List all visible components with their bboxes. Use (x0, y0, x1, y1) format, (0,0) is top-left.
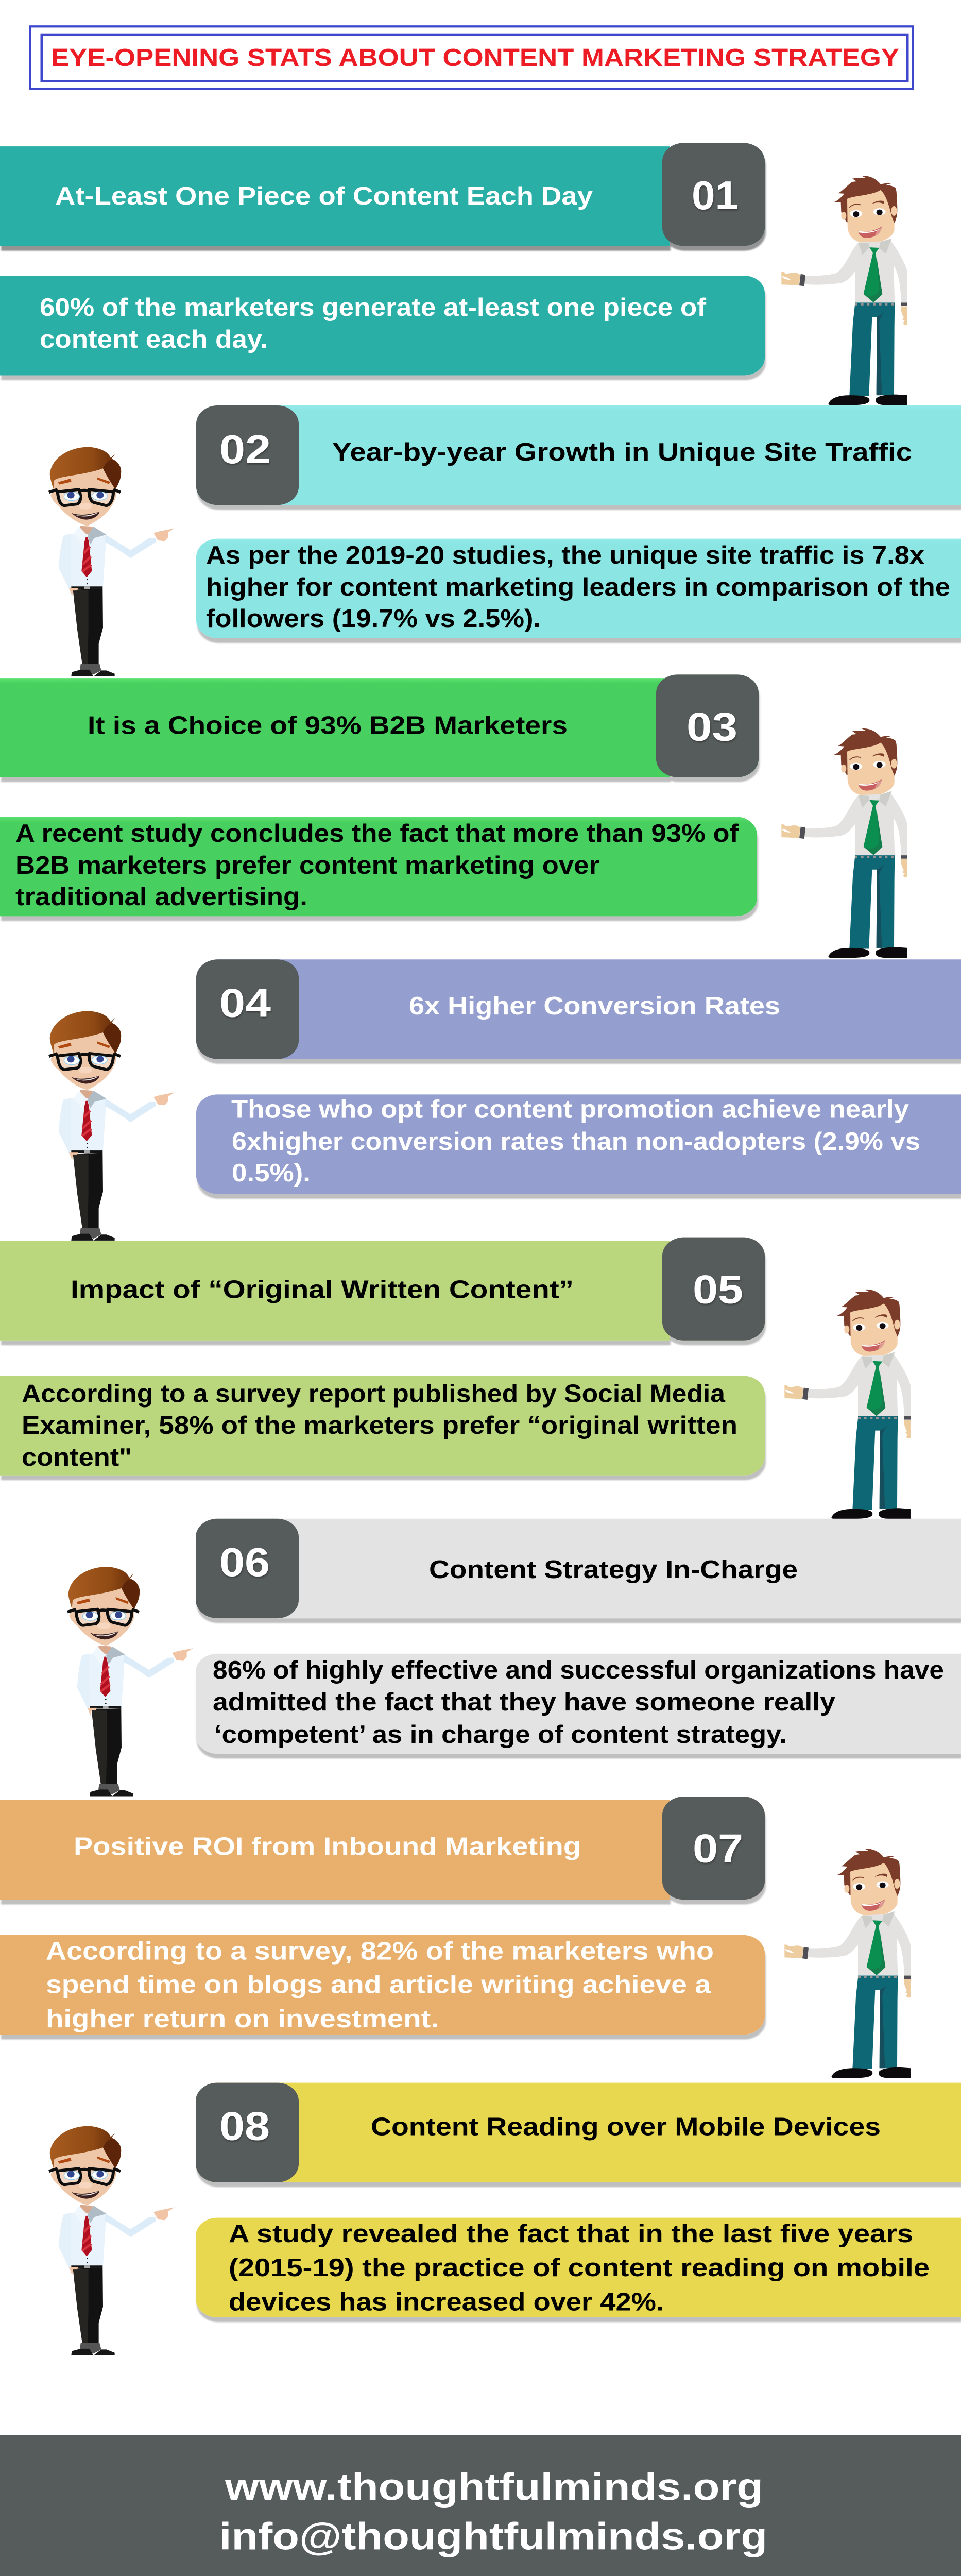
stat 03 header bar: 03 (687, 705, 737, 750)
stat 08 header bar (196, 2083, 961, 2182)
stat 08 header bar: Content Reading over Mobile Devices (371, 2112, 881, 2141)
character: man with glasses 2 (49, 447, 175, 676)
stat 05 text panel: Examiner, 58% of the marketers prefer “original written (22, 1411, 737, 1439)
stat 02 text panel: followers (19.7% vs 2.5%). (206, 604, 541, 633)
character: man with glasses 6 (67, 1567, 193, 1797)
stat 03 text panel: B2B marketers prefer content marketing over (15, 851, 599, 879)
stat 05 text panel: According to a survey report published by Social Media (22, 1379, 726, 1408)
title banner (30, 26, 913, 89)
stat 08 text panel: A study revealed the fact that in the last five years (229, 2219, 913, 2248)
stat 05 header bar (0, 1238, 765, 1341)
stat 07 header bar (0, 1797, 765, 1900)
stat 06 text panel (196, 1654, 961, 1754)
stat 03 text panel (0, 817, 757, 916)
stat 07 text panel: spend time on blogs and article writing achieve a (46, 1971, 711, 1999)
stat 05 text panel (0, 1376, 765, 1476)
stat 01 header bar (0, 143, 765, 246)
stat 04 text panel: Those who opt for content promotion achieve nearly (231, 1095, 909, 1123)
stat 05 header bar: 05 (693, 1267, 743, 1312)
stat 03 text panel: A recent study concludes the fact that more than 93% of (15, 819, 739, 848)
stat 07 header bar: 07 (693, 1826, 743, 1871)
stat 01 text panel (0, 276, 765, 375)
stat 08 text panel: devices has increased over 42%. (229, 2287, 664, 2316)
stat 01 text panel: 60% of the marketers generate at-least one piece of (40, 293, 707, 321)
stat 03 header bar: It is a Choice of 93% B2B Marketers (88, 711, 568, 740)
stat 01 header bar: 01 (692, 174, 739, 218)
character: man with green tie 5 (784, 1290, 911, 1519)
stat 07 header bar: Positive ROI from Inbound Marketing (74, 1833, 581, 1861)
stat 02 header bar: 02 (219, 427, 271, 472)
character: man with green tie 1 (781, 176, 907, 405)
title banner: EYE-OPENING STATS ABOUT CONTENT MARKETING STRATEGY (51, 44, 899, 72)
stat 07 text panel (0, 1935, 765, 2035)
character: man with glasses 4 (49, 1011, 175, 1241)
stat 06 header bar (196, 1519, 961, 1618)
stat 08 text panel: (2015-19) the practice of content reading on mobile (229, 2253, 930, 2282)
stat 02 header bar (196, 405, 961, 505)
stat 01 text panel: content each day. (40, 325, 268, 353)
footer contact band (0, 2435, 961, 2576)
stat 04 header bar: 6x Higher Conversion Rates (409, 992, 780, 1020)
stat 08 text panel (196, 2218, 961, 2317)
stat 04 text panel (196, 1094, 961, 1194)
footer contact band: www.thoughtfulminds.org (225, 2466, 763, 2509)
stat 02 header bar: Year-by-year Growth in Unique Site Traffic (332, 438, 912, 466)
stat 04 header bar (196, 959, 961, 1059)
character: man with glasses 8 (49, 2126, 175, 2355)
stat 06 text panel: admitted the fact that they have someone really (213, 1688, 835, 1716)
stat 06 text panel: ‘competent’ as in charge of content strategy. (214, 1720, 787, 1749)
stat 08 header bar: 08 (219, 2104, 270, 2149)
stat 02 text panel (196, 539, 961, 638)
stat 07 text panel: According to a survey, 82% of the marketers who (46, 1937, 714, 1965)
character: man with green tie 7 (784, 1849, 911, 2078)
stat 04 header bar: 04 (219, 981, 271, 1026)
stat 01 header bar: At-Least One Piece of Content Each Day (55, 182, 593, 210)
stat 06 header bar: Content Strategy In-Charge (429, 1555, 798, 1584)
stat 07 text panel: higher return on investment. (46, 2005, 439, 2033)
stat 03 text panel: traditional advertising. (15, 883, 307, 911)
stat 05 text panel: content" (22, 1443, 132, 1471)
character: man with green tie 3 (781, 728, 907, 958)
stat 05 header bar: Impact of “Original Written Content” (71, 1276, 574, 1303)
stat 04 text panel: 0.5%). (232, 1159, 311, 1187)
stat 03 header bar (0, 674, 759, 777)
footer contact band: info@thoughtfulminds.org (219, 2515, 767, 2558)
stat 06 header bar: 06 (219, 1540, 270, 1585)
